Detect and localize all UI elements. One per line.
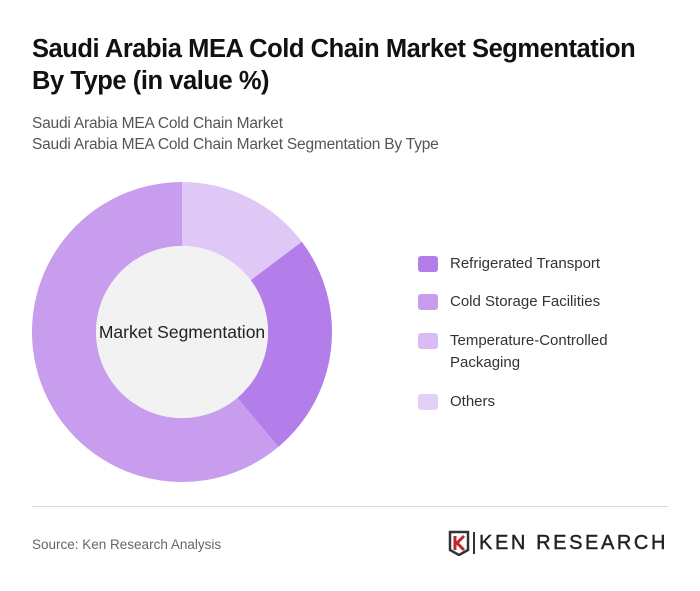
subtitle: Saudi Arabia MEA Cold Chain Market Segmentation By Type	[32, 136, 439, 153]
center label	[96, 246, 268, 418]
segment: refrigerated transport	[237, 242, 332, 447]
subtitle: Saudi Arabia MEA Cold Chain Market	[32, 115, 283, 132]
segment: cold storage facilities	[32, 182, 278, 482]
subtitle	[32, 115, 439, 153]
title	[32, 35, 635, 95]
segment: others	[182, 182, 302, 280]
legend: refrigerated transport: Refrigerated Transport	[450, 255, 600, 272]
logo: KEN RESEARCH	[479, 532, 668, 554]
title: By Type (in value %)	[32, 67, 269, 95]
legend: temperature-controlled packaging	[418, 332, 608, 371]
legend: temperature-controlled packaging: Temperature-Controlled	[450, 332, 608, 349]
title: Saudi Arabia MEA Cold Chain Market Segmentation	[32, 35, 635, 63]
legend: others: Others	[450, 393, 495, 410]
donut chart	[32, 182, 332, 482]
source: Source: Ken Research Analysis	[32, 537, 221, 552]
legend: temperature-controlled packaging: Packaging	[450, 354, 520, 371]
center label: Market Segmentation	[99, 322, 265, 342]
legend: others	[418, 393, 495, 410]
legend: cold storage: Cold Storage Facilities	[450, 293, 600, 310]
